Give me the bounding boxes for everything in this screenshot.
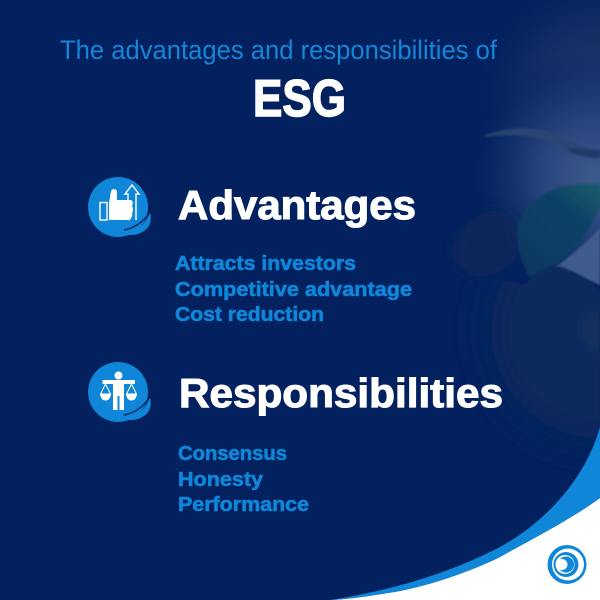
soil mound xyxy=(440,266,600,490)
front leaf xyxy=(517,184,600,278)
heading: Advantages: Advantages xyxy=(178,182,416,228)
list: advantages xyxy=(175,253,412,326)
bottom-right curve: white corner xyxy=(330,498,600,600)
back leaf xyxy=(450,210,520,278)
title line: The advantages and responsibilities of xyxy=(60,35,497,65)
icon: person with scales xyxy=(88,362,151,422)
list: advantages: Attracts investors xyxy=(175,253,356,275)
faded photo: seedling in soil xyxy=(440,0,600,490)
heading: Responsibilities: Responsibilities xyxy=(179,370,503,416)
list: responsibilities: Performance xyxy=(178,494,309,516)
heading: ESG: ESG xyxy=(253,70,346,128)
list: responsibilities: Honesty xyxy=(178,469,264,491)
light behind soil xyxy=(554,228,600,285)
list: responsibilities xyxy=(178,443,309,516)
list: responsibilities: Consensus xyxy=(178,443,287,465)
list: advantages: Cost reduction xyxy=(175,304,324,326)
list: advantages: Competitive advantage xyxy=(175,279,412,301)
icon: thumbs up with arrow xyxy=(88,177,151,237)
bottom-right curve: blue band xyxy=(330,427,600,600)
logo xyxy=(548,545,586,584)
